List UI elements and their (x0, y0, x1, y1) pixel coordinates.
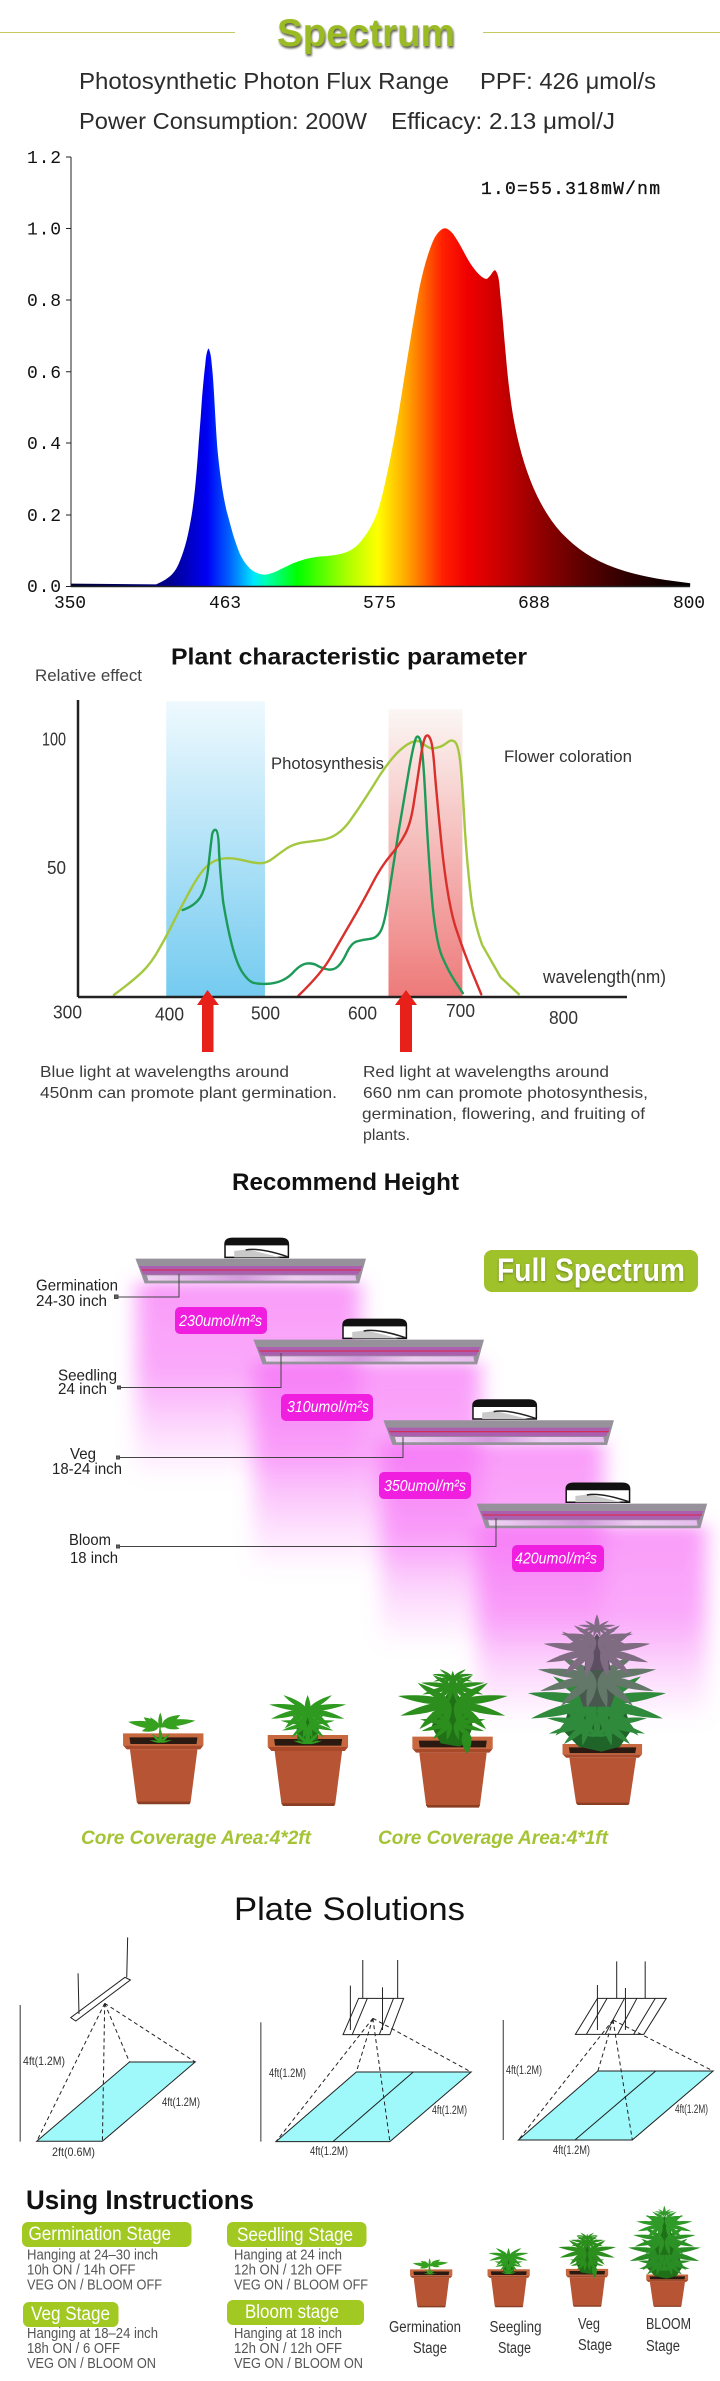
stage: bloom: Hanging at 18 inch (234, 2326, 342, 2342)
badge: 420: 420umol/m²s (515, 1550, 597, 1568)
height labels (36, 1278, 122, 1567)
stage: veg: Veg Stage (31, 2304, 110, 2325)
stage: veg: VEG ON / BLOOM ON (27, 2356, 156, 2372)
curve labels: wavelength(nm) (542, 967, 666, 987)
plant 2 (268, 1693, 348, 1806)
diagram: single lamp: 2ft(0.6M) (52, 2145, 95, 2159)
chart: plant response curves (42, 700, 666, 1052)
stage: seedling: VEG ON / BLOOM OFF (234, 2278, 368, 2294)
stage captions: Stage (413, 2340, 447, 2357)
x axis labels: 800 (673, 594, 705, 614)
stage: germination: Germination Stage (28, 2224, 171, 2245)
badge: 230 (175, 1307, 267, 1334)
y axis labels: 0.4 (27, 435, 61, 455)
stage: veg: Hanging at 18–24 inch (27, 2326, 158, 2342)
diagram: two lamps (261, 1960, 471, 2158)
curve labels: Flower coloration (504, 747, 632, 766)
section: recommend height (36, 1169, 707, 1849)
small plant 4 (627, 2206, 701, 2307)
title: Spectrum: Spectrum (277, 12, 455, 55)
x axis labels: 688 (518, 594, 550, 614)
lamp: germination (135, 1238, 366, 1283)
value labels: 500 (251, 1004, 280, 1024)
stage captions: Germination (389, 2319, 461, 2336)
text: photon flux specs: Efficacy: 2.13 μmol/J (391, 108, 615, 134)
y axis title: Relative effect (35, 667, 142, 685)
stage captions: BLOOM (646, 2316, 691, 2333)
lamp: bloom (477, 1483, 707, 1528)
coverage captions: Core Coverage Area:4*2ft (81, 1828, 312, 1849)
chart: spectral power distribution (27, 149, 705, 614)
section: spectrum (0, 12, 720, 614)
x axis labels (54, 594, 705, 614)
text: blue light note: Blue light at wavelengths around (40, 1064, 289, 1081)
y axis labels: 1.0 (27, 220, 61, 240)
text: photon flux specs: PPF: 426 μmol/s (480, 68, 656, 94)
arrow: red 660nm (395, 990, 417, 1052)
small plant 1 (410, 2258, 452, 2307)
stage: germination: VEG ON / BLOOM OFF (27, 2278, 162, 2294)
section: using instructions (22, 2185, 701, 2372)
stage captions: Stage (646, 2338, 680, 2355)
badge: full spectrum: Full Spectrum (497, 1252, 685, 1288)
stage: germination: Hanging at 24–30 inch (27, 2248, 158, 2264)
y axis labels: 0.8 (27, 292, 61, 312)
coverage captions (81, 1828, 609, 1849)
leader lines (114, 1274, 496, 1548)
diagram: two lamps: 4ft(1.2M) (432, 2105, 467, 2117)
text: red light note: Red light at wavelengths around (363, 1064, 609, 1081)
value labels: 600 (348, 1004, 377, 1024)
value labels: 50 (47, 858, 66, 878)
bands (166, 701, 462, 997)
x axis labels: 575 (363, 594, 396, 614)
stage: bloom (227, 2300, 364, 2372)
stage: seedling (227, 2222, 368, 2294)
small plant 3 (558, 2232, 616, 2307)
value labels: 100 (42, 730, 66, 750)
diagram: four lamps: 4ft(1.2M) (506, 2065, 542, 2077)
plants and pots (123, 1614, 667, 1808)
axes (78, 700, 627, 997)
text: red light note: plants. (363, 1127, 410, 1144)
y axis labels: 0.0 (27, 578, 61, 598)
height labels: 18 inch (70, 1550, 118, 1567)
small growth stage plants (410, 2206, 701, 2307)
diagram: two lamps: 4ft(1.2M) (269, 2068, 306, 2080)
curve labels (271, 747, 666, 987)
value labels: 400 (155, 1004, 184, 1024)
plant 4 (527, 1614, 667, 1805)
diagram: single lamp: 4ft(1.2M) (23, 2054, 65, 2068)
y axis labels: 0.2 (27, 507, 61, 527)
x axis labels: 463 (209, 594, 241, 614)
heading: Using Instructions (26, 2185, 254, 2215)
stage: seedling: Seedling Stage (237, 2225, 353, 2246)
section: plant characteristic parameter (35, 644, 666, 1144)
small plant 2 (488, 2247, 530, 2307)
height labels: Seedling (58, 1368, 117, 1384)
stage: bloom: VEG ON / BLOOM ON (234, 2356, 363, 2372)
heading: Plate Solutions (234, 1891, 465, 1927)
height labels: Bloom (69, 1532, 111, 1549)
stage captions: Stage (498, 2340, 531, 2357)
height labels: 18-24 inch (52, 1461, 122, 1478)
text: photon flux specs (79, 68, 656, 134)
plant 1 (123, 1712, 203, 1804)
text: blue light note (40, 1064, 337, 1102)
stage: seedling: 12h ON / 12h OFF (234, 2262, 342, 2278)
text: photon flux specs: Power Consumption: 200W (79, 108, 367, 134)
diagram: four lamps: 4ft(1.2M) (553, 2145, 590, 2157)
text: red light note (362, 1064, 648, 1144)
value labels (42, 730, 578, 1028)
height labels: Germination (36, 1278, 118, 1294)
text: photon flux specs: Photosynthetic Photon Flux Range (79, 68, 449, 94)
coverage captions: Core Coverage Area:4*1ft (378, 1828, 609, 1849)
height labels: 24-30 inch (36, 1293, 107, 1310)
diagram: single lamp (20, 1937, 200, 2159)
stage: veg (23, 2302, 158, 2372)
value labels: 300 (53, 1002, 82, 1022)
stage captions: Stage (578, 2337, 612, 2354)
x axis labels: 350 (54, 594, 86, 614)
curves (114, 735, 519, 996)
spectrum area (71, 228, 690, 586)
badge: 230: 230umol/m²s (178, 1313, 262, 1330)
badge: 310 (281, 1394, 373, 1421)
height labels: Veg (70, 1446, 96, 1463)
plant 3 (397, 1668, 509, 1808)
y axis labels: 1.2 (27, 149, 61, 169)
scale note: 1.0=55.318mW/nm (481, 180, 660, 200)
stage: germination (22, 2222, 192, 2294)
axes and ticks (66, 157, 690, 586)
diagram: two lamps: 4ft(1.2M) (310, 2146, 348, 2158)
stage: bloom: Bloom stage (245, 2302, 339, 2323)
stage: veg: 18h ON / 6 OFF (27, 2341, 120, 2357)
lamp: veg (383, 1400, 614, 1445)
light beams (136, 1282, 706, 1725)
stage captions (389, 2316, 691, 2357)
lamp: seedling (253, 1319, 484, 1364)
badge: 350: 350umol/m²s (384, 1478, 466, 1495)
value labels: 800 (549, 1008, 578, 1028)
arrow: blue 450nm (197, 990, 219, 1052)
value labels: 700 (446, 1001, 475, 1021)
diagram: single lamp: 4ft(1.2M) (162, 2095, 200, 2109)
heading: Plant characteristic parameter (171, 644, 527, 670)
stage captions: Seegling (490, 2319, 542, 2336)
section: plate solutions (20, 1891, 713, 2159)
height labels: 24 inch (58, 1381, 107, 1398)
y axis labels: 0.6 (27, 364, 61, 384)
text: blue light note: 450nm can promote plant germination. (40, 1085, 337, 1102)
stage: seedling: Hanging at 24 inch (234, 2248, 342, 2264)
text: red light note: 660 nm can promote photosynthesis, (363, 1085, 648, 1102)
curve labels: Photosynthesis (271, 754, 384, 773)
y axis labels (27, 149, 61, 598)
heading: Recommend Height (232, 1169, 459, 1196)
diagram: four lamps (503, 1961, 713, 2157)
diagram: four lamps: 4ft(1.2M) (675, 2104, 708, 2116)
stage: bloom: 12h ON / 12h OFF (234, 2341, 342, 2357)
badge: 350 (379, 1472, 471, 1499)
stage captions: Veg (578, 2316, 600, 2333)
stage: germination: 10h ON / 14h OFF (27, 2262, 136, 2278)
text: red light note: germination, flowering, and fruiting of (362, 1106, 646, 1123)
badge: 420 (512, 1545, 604, 1572)
badge: 310: 310umol/m²s (287, 1399, 369, 1416)
